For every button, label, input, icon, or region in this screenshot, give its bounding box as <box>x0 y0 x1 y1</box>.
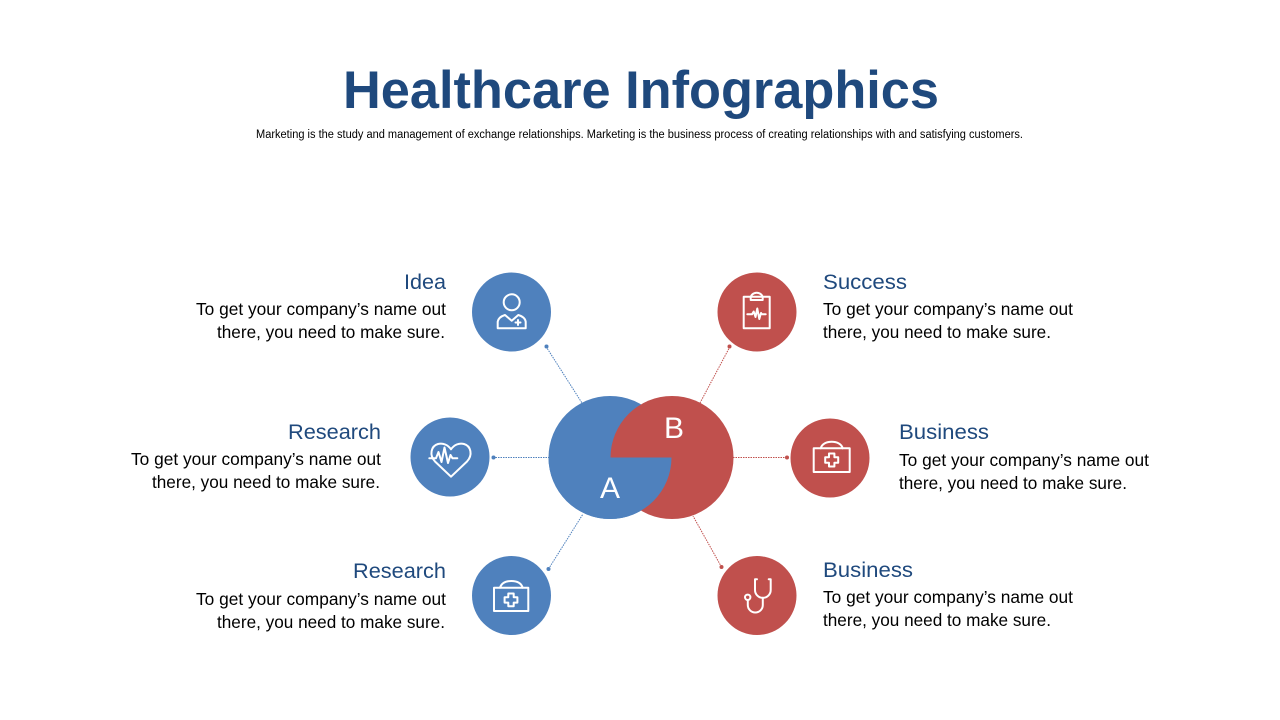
text block: idea: there, you need to make sure. <box>217 322 445 342</box>
text block: research bottom: Research <box>353 560 446 583</box>
central overlapping circles A and B <box>548 396 734 519</box>
text block: research middle: To get your company’s name out <box>131 449 381 469</box>
text block: research bottom <box>196 560 446 632</box>
text block: business bottom <box>823 559 1073 630</box>
node: research (medical kit icon) <box>472 556 551 635</box>
text block: business bottom: there, you need to make sure. <box>823 610 1051 630</box>
label B: B <box>664 412 684 445</box>
connector: business middle <box>733 456 789 460</box>
connector: success <box>700 344 732 403</box>
text block: business bottom: To get your company’s name out <box>823 587 1073 607</box>
text block: idea: Idea <box>404 271 446 294</box>
text block: business bottom: Business <box>823 559 913 582</box>
text block: research bottom: To get your company’s name out <box>196 589 446 609</box>
title: Healthcare Infographics <box>343 61 939 120</box>
text block: idea <box>196 271 446 342</box>
connector: research middle <box>492 456 549 460</box>
connector: research bottom <box>546 514 583 571</box>
text block: research bottom: there, you need to make sure. <box>217 612 445 632</box>
text block: business middle: there, you need to make sure. <box>899 473 1127 493</box>
node: research (heart icon) <box>410 418 490 496</box>
subtitle: Marketing is the study and management of exchange relationships. Marketing is the business process of creating relationships with and satisfying customers. <box>256 129 1023 141</box>
text block: success: Success <box>823 271 907 294</box>
connector: idea <box>544 344 582 403</box>
text block: success: To get your company’s name out <box>823 299 1073 319</box>
label A: A <box>600 472 620 505</box>
connector: business bottom <box>693 516 724 569</box>
node: business (medical kit icon) <box>790 418 870 498</box>
text block: idea: To get your company’s name out <box>196 299 446 319</box>
text block: business middle: To get your company’s name out <box>899 450 1149 470</box>
text block: research middle <box>131 421 381 492</box>
text block: business middle <box>899 421 1149 493</box>
text block: business middle: Business <box>899 421 989 444</box>
text block: research middle: there, you need to make sure. <box>152 472 380 492</box>
text block: research middle: Research <box>288 421 381 444</box>
node: idea (doctor icon) <box>472 272 551 352</box>
text block: success <box>823 271 1073 342</box>
node: business (stethoscope icon) <box>718 556 796 635</box>
text block: success: there, you need to make sure. <box>823 322 1051 342</box>
node: success (clipboard icon) <box>718 272 796 352</box>
